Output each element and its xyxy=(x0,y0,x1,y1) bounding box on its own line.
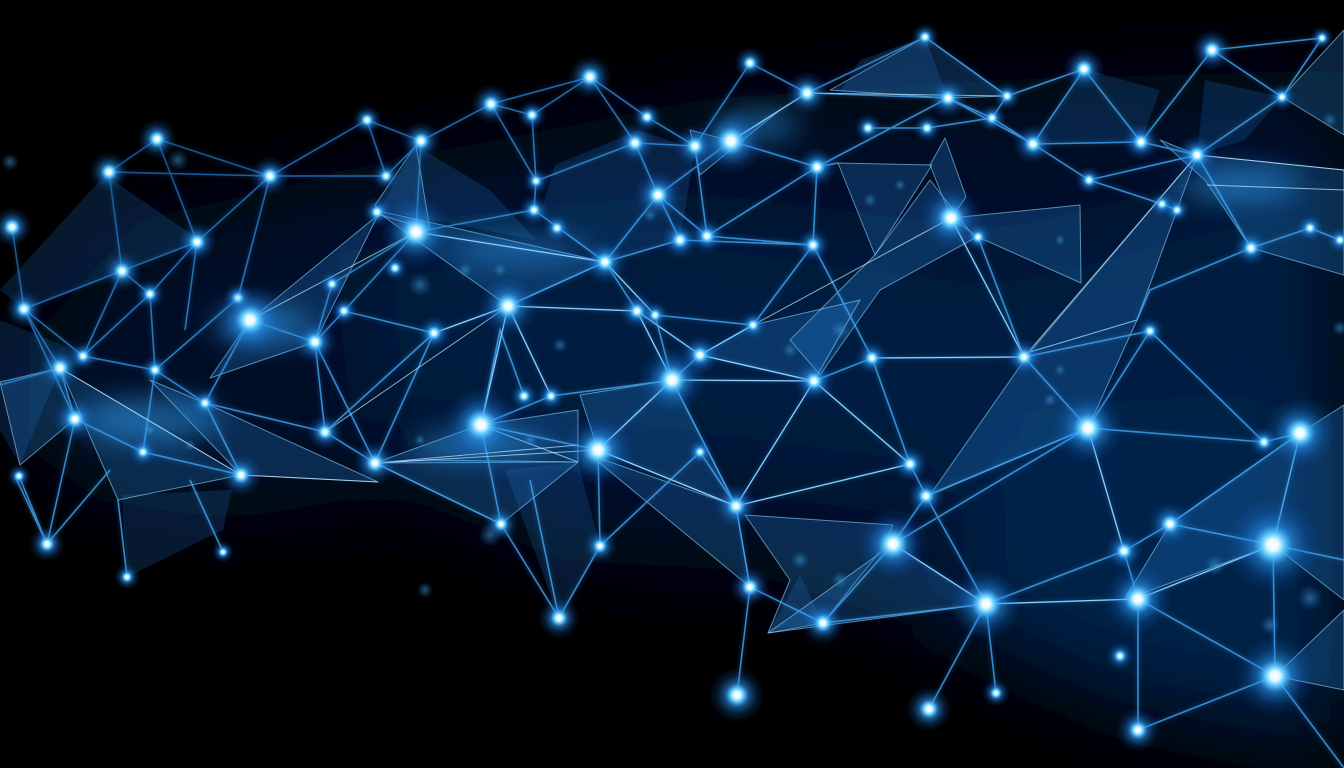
bright edges xyxy=(60,93,1344,604)
facet hot spots xyxy=(80,111,1300,459)
large nodes xyxy=(214,107,1336,723)
dim facets xyxy=(0,37,1282,630)
bokeh specks xyxy=(1,112,1344,635)
